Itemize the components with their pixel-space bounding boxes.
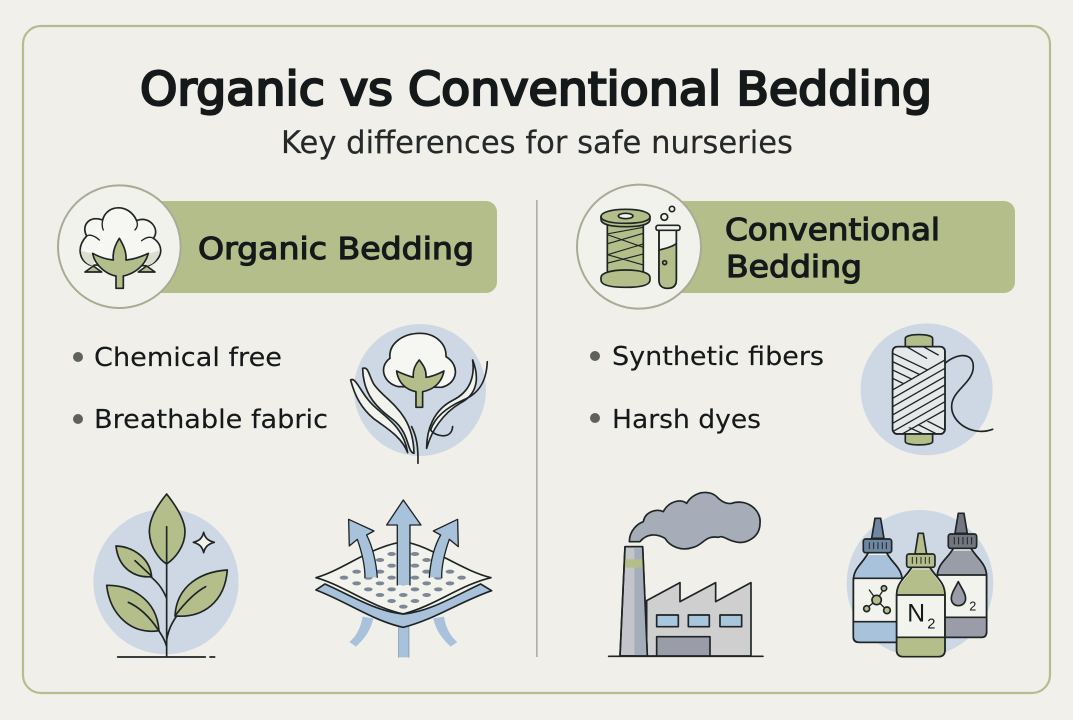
icon: spool and test tube badge xyxy=(577,185,701,309)
heading text: Organic Bedding xyxy=(198,232,474,267)
center bottle: N xyxy=(907,601,925,628)
conventional heading banner: Bedding xyxy=(726,250,862,285)
top layer xyxy=(316,542,491,614)
panel: conventional bedding column xyxy=(577,185,1015,657)
icon: thread spool xyxy=(861,323,993,455)
bullet list: conventional: Synthetic fibers xyxy=(612,342,824,372)
panel: organic bedding column xyxy=(58,185,497,657)
thread band xyxy=(893,360,945,433)
subtitle: Key differences for safe nurseries xyxy=(281,125,793,161)
left bottle xyxy=(853,518,902,642)
title: Organic vs Conventional Bedding xyxy=(140,62,932,116)
upper and lower down-right windings xyxy=(893,353,945,434)
conventional heading banner xyxy=(577,185,1015,309)
organic heading banner xyxy=(58,185,497,308)
perforations xyxy=(340,552,466,609)
heading text: Conventional xyxy=(725,213,940,248)
bullet list: conventional xyxy=(590,342,824,435)
icon: chemical bottles xyxy=(847,510,993,657)
bullet list: organic xyxy=(73,343,328,435)
bullet list: conventional: Harsh dyes xyxy=(612,405,761,435)
center bottle xyxy=(897,533,945,657)
icon: cotton with fibers xyxy=(351,324,487,463)
icon: breathable fabric xyxy=(316,500,492,657)
center bottle: 2 xyxy=(927,616,935,632)
right bottle: 2 xyxy=(969,600,976,614)
lower arrows xyxy=(349,617,457,657)
icon: cotton boll badge xyxy=(58,185,181,308)
icon: leafy plant xyxy=(93,494,239,657)
bullet list: organic: Chemical free xyxy=(94,343,282,373)
bullet list: organic: Breathable fabric xyxy=(94,405,328,435)
icon: factory with smoke xyxy=(609,492,763,656)
right bottle xyxy=(937,513,987,637)
upward arrows xyxy=(387,500,421,585)
lower layer xyxy=(316,584,492,627)
